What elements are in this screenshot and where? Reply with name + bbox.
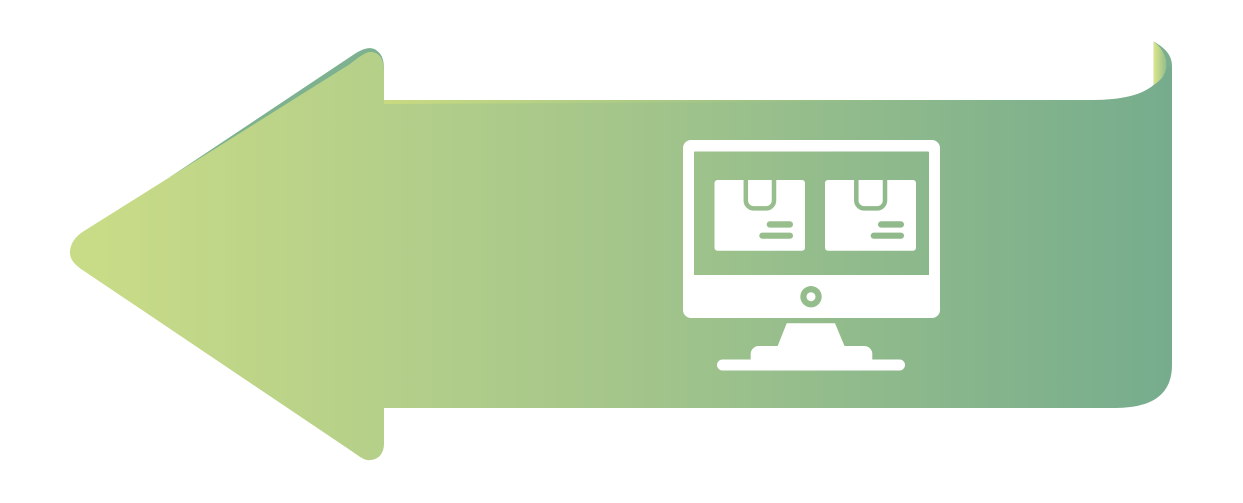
parcel right label lines (871, 221, 904, 239)
monitor body (683, 140, 940, 318)
fold inner highlight (1154, 42, 1166, 85)
parcel left box (714, 180, 805, 251)
fold back at top right (1090, 42, 1172, 110)
parcel left label lines (759, 221, 793, 239)
arrow body (70, 52, 1172, 460)
arrow: banner shape (70, 42, 1172, 460)
monitor stand (717, 323, 905, 370)
parcel right box (825, 180, 916, 251)
arrow head back edge (170, 48, 384, 190)
parcel right (825, 180, 916, 251)
parcel left tape (746, 180, 774, 208)
icon: computer monitor with two parcels (683, 140, 940, 370)
power button (806, 292, 816, 301)
parcel left (714, 180, 805, 251)
banner top edge stripe (384, 100, 1100, 110)
parcel right tape (856, 180, 885, 208)
